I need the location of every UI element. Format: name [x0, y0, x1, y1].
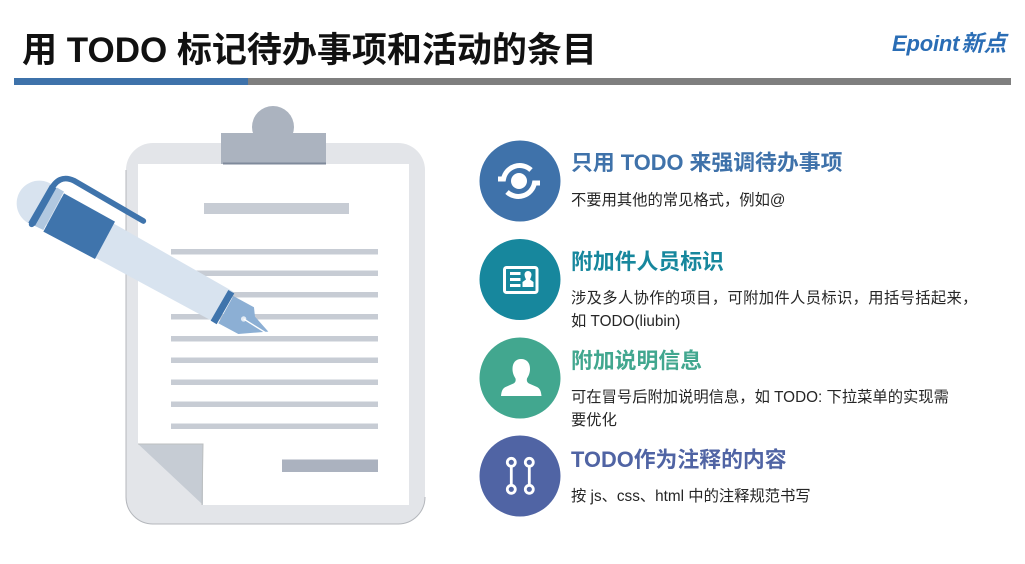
cap band light	[35, 187, 64, 230]
pen body	[95, 223, 233, 322]
pen	[17, 179, 268, 334]
item 1 heading: 只用 TODO 来强调待办事项	[571, 150, 842, 175]
item 3 heading: 附加说明信息	[571, 348, 702, 373]
item 2 text	[571, 290, 978, 330]
paper heading line	[204, 203, 349, 214]
item 2 icon: id card	[480, 239, 560, 320]
paper signature bar	[282, 460, 378, 472]
item 4 icon: connectors	[480, 436, 560, 516]
item 2 heading: 附加件人员标识	[571, 249, 724, 274]
clipboard board	[126, 143, 425, 524]
nib slit	[241, 316, 268, 334]
item 4 heading: TODO作为注释的内容	[571, 447, 787, 472]
item 3 text: 要优化	[571, 412, 617, 428]
collar	[211, 290, 234, 324]
paper sheet	[138, 164, 409, 505]
paper text lines	[171, 249, 378, 429]
item 3 icon: person	[480, 338, 560, 418]
item 1 text: 不要用其他的常见格式，例如@	[571, 192, 785, 209]
item 2 text: 涉及多人协作的项目，可附加件人员标识，用括号括起来，	[571, 290, 978, 307]
item 1 icon: sync circle	[480, 140, 560, 222]
illustration: clipboard and pen	[16, 106, 426, 524]
clip	[221, 106, 326, 164]
item 2 text: 如 TODO(liubin)	[571, 312, 680, 330]
pen cap	[43, 193, 115, 259]
pen end cap	[17, 181, 62, 226]
item 4 text: 按 js、css、html 中的注释规范书写	[571, 488, 811, 505]
title: 用 TODO 标记待办事项和活动的条目	[22, 31, 597, 70]
logo: Epoint新点	[892, 31, 1006, 56]
header bar	[14, 78, 1011, 85]
item 3 text: 可在冒号后附加说明信息，如 TODO: 下拉菜单的实现需	[571, 389, 949, 406]
item 3 text	[571, 388, 949, 428]
nib	[218, 296, 268, 334]
pen clip	[32, 179, 143, 224]
page fold	[138, 444, 203, 505]
cap band	[28, 185, 57, 226]
